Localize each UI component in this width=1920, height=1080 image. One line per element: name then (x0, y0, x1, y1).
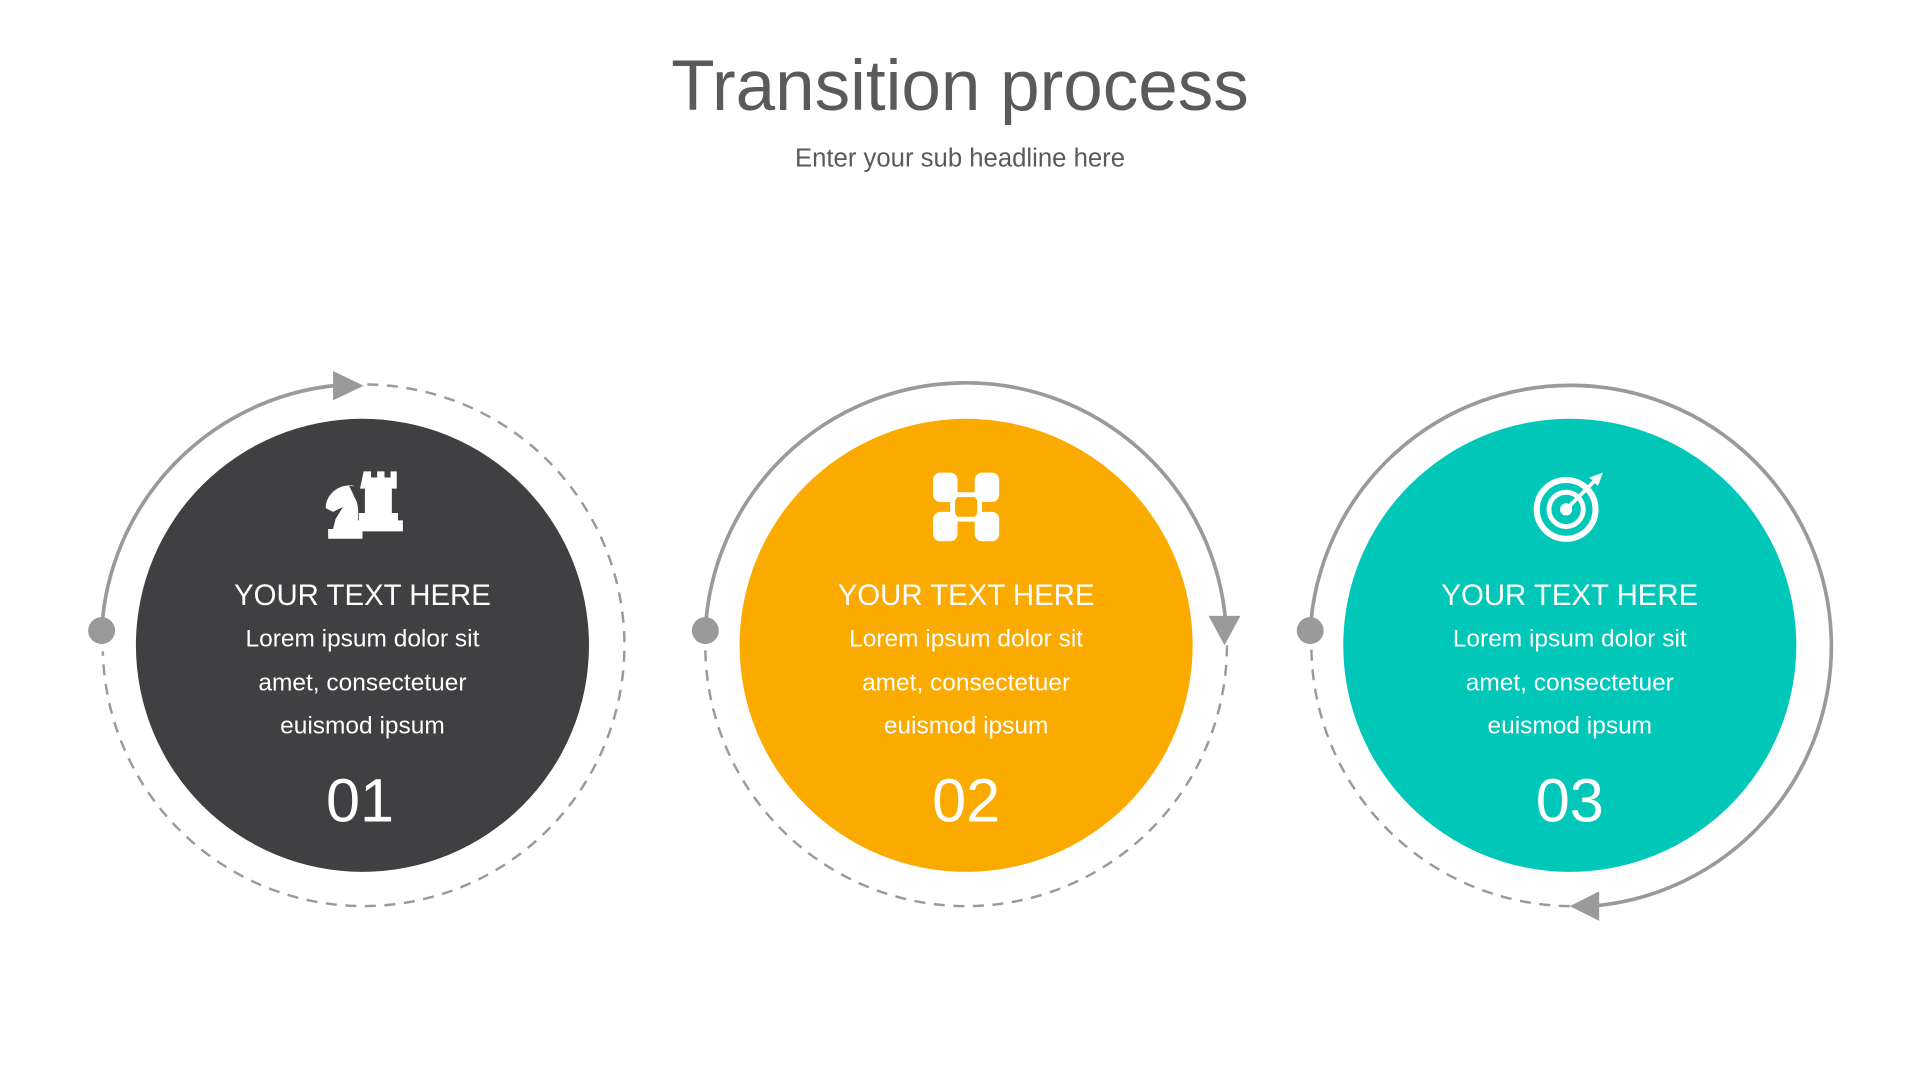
ring arrow 2 (692, 383, 1240, 906)
body 2: Lorem ipsum dolor sit (849, 626, 1083, 653)
body 3: Lorem ipsum dolor sit (1453, 626, 1687, 653)
circle 3 (1343, 419, 1796, 872)
number 3: 03 (1536, 767, 1604, 835)
icon: chess pieces (326, 471, 403, 539)
body 3 (1453, 626, 1687, 739)
subtitle: Enter your sub headline here (795, 145, 1125, 173)
heading 1: YOUR TEXT HERE (234, 579, 491, 612)
body 1: Lorem ipsum dolor sit (245, 626, 480, 653)
body 2: euismod ipsum (884, 712, 1048, 739)
body 3: amet, consectetuer (1466, 670, 1674, 697)
step 2 (692, 383, 1240, 906)
body 3: euismod ipsum (1488, 712, 1652, 739)
icon: target (1537, 473, 1603, 539)
ring arrow 3 (1297, 385, 1831, 921)
body 1 (245, 626, 480, 739)
body 2: amet, consectetuer (862, 670, 1070, 697)
body 1: euismod ipsum (280, 712, 445, 739)
heading 3: YOUR TEXT HERE (1441, 579, 1698, 612)
ring arrow 1 (88, 371, 624, 906)
circle 1 (136, 419, 589, 872)
step 3 (1297, 385, 1831, 921)
title: Transition process (671, 47, 1249, 126)
circle 2 (740, 419, 1193, 872)
number 2: 02 (932, 767, 1000, 835)
body 1: amet, consectetuer (258, 670, 466, 697)
icon: hands (933, 473, 999, 541)
step 1 (88, 371, 624, 906)
body 2 (849, 626, 1083, 739)
number 1: 01 (326, 767, 394, 835)
heading 2: YOUR TEXT HERE (838, 579, 1095, 612)
